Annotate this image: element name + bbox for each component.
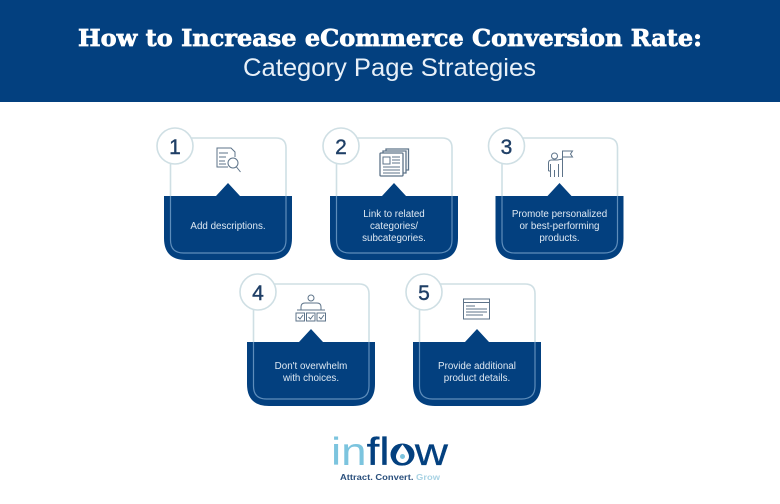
description text: products. (539, 233, 580, 244)
description text: Link to related (363, 209, 425, 220)
icon: document with magnifier (217, 148, 240, 172)
icon: text window (464, 299, 490, 319)
logo: inflow (331, 431, 449, 482)
panel: step 4 choices (240, 274, 375, 406)
description text: Provide additional (438, 361, 516, 372)
description text: Promote personalized (512, 209, 607, 220)
number 3: 3 (501, 136, 512, 159)
description text: subcategories. (362, 233, 426, 244)
icon: person with flag (548, 151, 572, 177)
number 2: 2 (335, 136, 347, 159)
title: How to Increase eCommerce Conversion Rate: (78, 25, 702, 52)
icon: water drop (390, 444, 414, 466)
description text: with choices. (282, 373, 339, 384)
header banner (0, 0, 780, 102)
description text: Don't overwhelm (275, 361, 347, 372)
subtitle: Category Page Strategies (243, 54, 536, 82)
number 5: 5 (418, 282, 430, 305)
panel: step 5 product details (406, 274, 541, 406)
description text: categories/ (370, 221, 418, 232)
number 1: 1 (169, 136, 181, 159)
panel: step 2 related categories (323, 128, 458, 260)
description text: Add descriptions. (190, 221, 266, 232)
panel: step 3 personalized products (488, 128, 624, 260)
wordmark: inflow (331, 431, 449, 474)
number 4: 4 (252, 282, 264, 305)
description text: product details. (444, 373, 510, 384)
icon: person above checkboxes (296, 295, 326, 321)
description text: or best-performing (519, 221, 600, 232)
panel: step 1 add descriptions (157, 128, 292, 260)
icon: stacked pages (380, 149, 408, 176)
tagline: Attract. Convert. Grow (340, 472, 440, 482)
